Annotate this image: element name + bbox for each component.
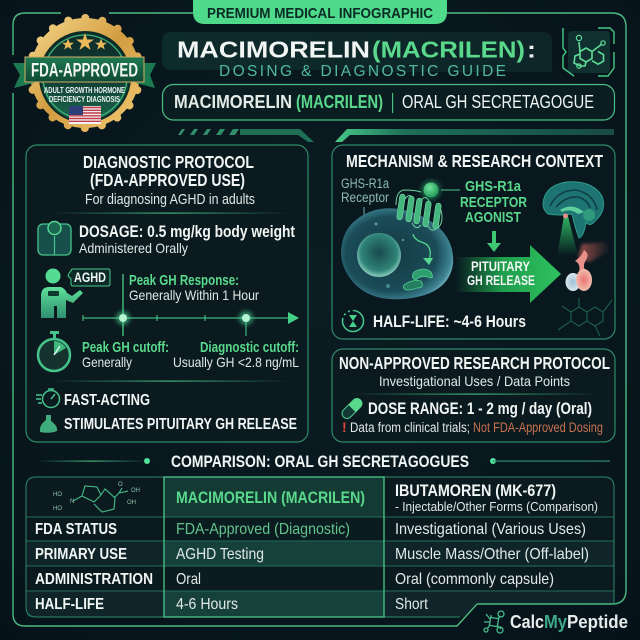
header: ibutamoren: IBUTAMOREN (MK-677)	[395, 482, 556, 500]
half-life icon	[342, 310, 364, 332]
timeline arrow	[83, 274, 299, 336]
cell illustration	[341, 208, 453, 299]
row: administration: Oral	[176, 571, 201, 588]
warning note	[342, 419, 603, 435]
half-life text: HALF-LIFE: ~4-6 Hours	[373, 313, 526, 331]
row: primary use: AGHD Testing	[176, 546, 264, 563]
warning note: Data from clinical trials;	[350, 420, 470, 435]
title box: :	[527, 36, 536, 62]
subtitle box: (MACRILEN)	[296, 92, 383, 112]
FDA-approved badge	[13, 18, 156, 128]
icon: patient with AGHD label: AGHD	[74, 270, 106, 285]
pituitary release arrow: PITUITARY	[471, 259, 530, 274]
header: ibutamoren	[395, 482, 598, 514]
brain illustration	[543, 182, 604, 256]
peak GH cutoff text: Peak GH cutoff:	[82, 340, 169, 356]
pituitary release arrow: GH RELEASE	[467, 273, 535, 288]
title box: DOSING & DIAGNOSTIC GUIDE	[219, 63, 506, 80]
heading: diagnostic protocol: (FDA-APPROVED USE)	[90, 170, 245, 190]
row: primary use	[35, 546, 589, 563]
dosage text	[79, 223, 295, 256]
comparison table	[26, 477, 614, 617]
agonist label: AGONIST	[465, 209, 521, 226]
diagnostic cutoff text	[173, 340, 299, 370]
wordmark	[510, 612, 628, 632]
FDA-approved badge: FDA-APPROVED	[31, 60, 138, 82]
header: macimorelin: MACIMORELIN (MACRILEN)	[176, 489, 365, 507]
receptor label: Receptor	[341, 190, 389, 205]
icon: chemical structure: N	[70, 499, 74, 505]
row: half-life: HALF-LIFE	[35, 596, 104, 613]
warning note: Not FDA-Approved Dosing	[473, 420, 603, 435]
icon: stopwatch	[38, 331, 70, 371]
dose range text: DOSE RANGE: 1 - 2 mg / day (Oral)	[368, 400, 592, 418]
dosage text: Administered Orally	[79, 240, 188, 256]
peak GH response text: Peak GH Response:	[129, 273, 239, 289]
panel: non-approved research protocol	[332, 349, 615, 442]
icon: chemical structure: HO	[53, 506, 62, 512]
receptor helices	[396, 190, 442, 230]
warning note: !	[342, 419, 347, 435]
wordmark: Calc	[510, 612, 544, 632]
heading: diagnostic protocol	[83, 152, 255, 208]
row: FDA status	[35, 521, 586, 538]
subtitle box: MACIMORELIN	[174, 92, 292, 112]
icon: chemical structure: O	[118, 482, 123, 488]
peak GH cutoff text	[82, 340, 169, 370]
icon: network	[484, 611, 504, 633]
icon: molecule emblem	[563, 28, 614, 76]
icon: fast-acting timer	[36, 389, 60, 408]
icon: chemical structure: OH	[131, 488, 140, 494]
row: half-life: Short	[395, 596, 428, 613]
header: ibutamoren: - Injectable/Other Forms (Comparison)	[395, 499, 598, 514]
row: administration: ADMINISTRATION	[35, 571, 153, 588]
wordmark: Peptide	[567, 612, 628, 632]
icon: chemical structure: OH	[127, 500, 136, 506]
row: primary use: PRIMARY USE	[35, 546, 127, 563]
comparison heading	[37, 453, 610, 471]
decorative molecule	[558, 298, 612, 336]
logo: CalcMyPeptide	[484, 611, 628, 633]
peak GH response text: Generally Within 1 Hour	[129, 287, 259, 303]
badge stars	[62, 33, 107, 50]
row: FDA status: FDA-Approved (Diagnostic)	[176, 521, 350, 538]
row: half-life: 4-6 Hours	[176, 596, 238, 613]
down arrow	[487, 231, 501, 252]
badge flag	[69, 106, 101, 124]
title box: (MACRILEN)	[372, 36, 525, 62]
heading: diagnostic protocol: For diagnosing AGHD in adults	[85, 192, 255, 208]
top banner: PREMIUM MEDICAL INFOGRAPHIC	[207, 5, 433, 22]
row: administration: Oral (commonly capsule)	[395, 571, 554, 588]
icon: pituitary flask	[40, 415, 57, 433]
table background and rows	[26, 477, 614, 617]
FDA-approved badge: ADULT GROWTH HORMONE	[44, 86, 125, 95]
subtitle box	[162, 84, 614, 120]
title box: MACIMORELIN	[177, 36, 370, 62]
pituitary release arrow	[455, 245, 561, 303]
peak GH cutoff text: Generally	[82, 354, 132, 370]
icon: patient with AGHD label	[41, 268, 110, 318]
subtitle box: ORAL GH SECRETAGOGUE	[402, 92, 594, 112]
heading: non-approved	[339, 353, 610, 389]
fast-acting label: FAST-ACTING	[64, 392, 150, 409]
icon: capsule	[340, 396, 364, 421]
row: half-life	[35, 596, 428, 613]
agonist label: GHS-R1a	[465, 178, 522, 195]
pituitary release label: STIMULATES PITUITARY GH RELEASE	[64, 416, 297, 433]
receptor label: GHS-R1a	[341, 176, 389, 191]
panel: mechanism and research context	[332, 145, 615, 339]
row: administration	[35, 571, 554, 588]
dosage text: DOSAGE: 0.5 mg/kg body weight	[79, 223, 295, 241]
agonist label: RECEPTOR	[460, 194, 527, 211]
FDA-approved badge: DEFICIENCY DIAGNOSIS	[49, 95, 120, 104]
title box	[162, 32, 552, 80]
icon: chemical structure	[53, 482, 140, 512]
row: FDA status: Investigational (Various Uses)	[395, 521, 586, 538]
receptor label	[341, 176, 389, 228]
peak GH response text	[129, 273, 259, 303]
pituitary illustration	[566, 242, 610, 291]
row: FDA status: FDA STATUS	[35, 521, 117, 538]
heading: diagnostic protocol: DIAGNOSTIC PROTOCOL	[83, 152, 254, 172]
icon: weighing scale	[38, 222, 71, 255]
agonist molecule	[421, 180, 460, 200]
panel: diagnostic protocol	[26, 145, 308, 442]
diagnostic cutoff text: Diagnostic cutoff:	[200, 340, 299, 356]
row: primary use: Muscle Mass/Other (Off-label)	[395, 546, 589, 563]
comparison heading: COMPARISON: ORAL GH SECRETAGOGUES	[171, 453, 469, 471]
icon: chemical structure: HO	[53, 492, 62, 498]
agonist label	[460, 178, 527, 226]
top banner	[193, 0, 447, 24]
diagnostic cutoff text: Usually GH <2.8 ng/mL	[173, 354, 299, 370]
wordmark: My	[544, 612, 567, 632]
heading: non-approved: Investigational Uses / Data Points	[379, 373, 570, 389]
